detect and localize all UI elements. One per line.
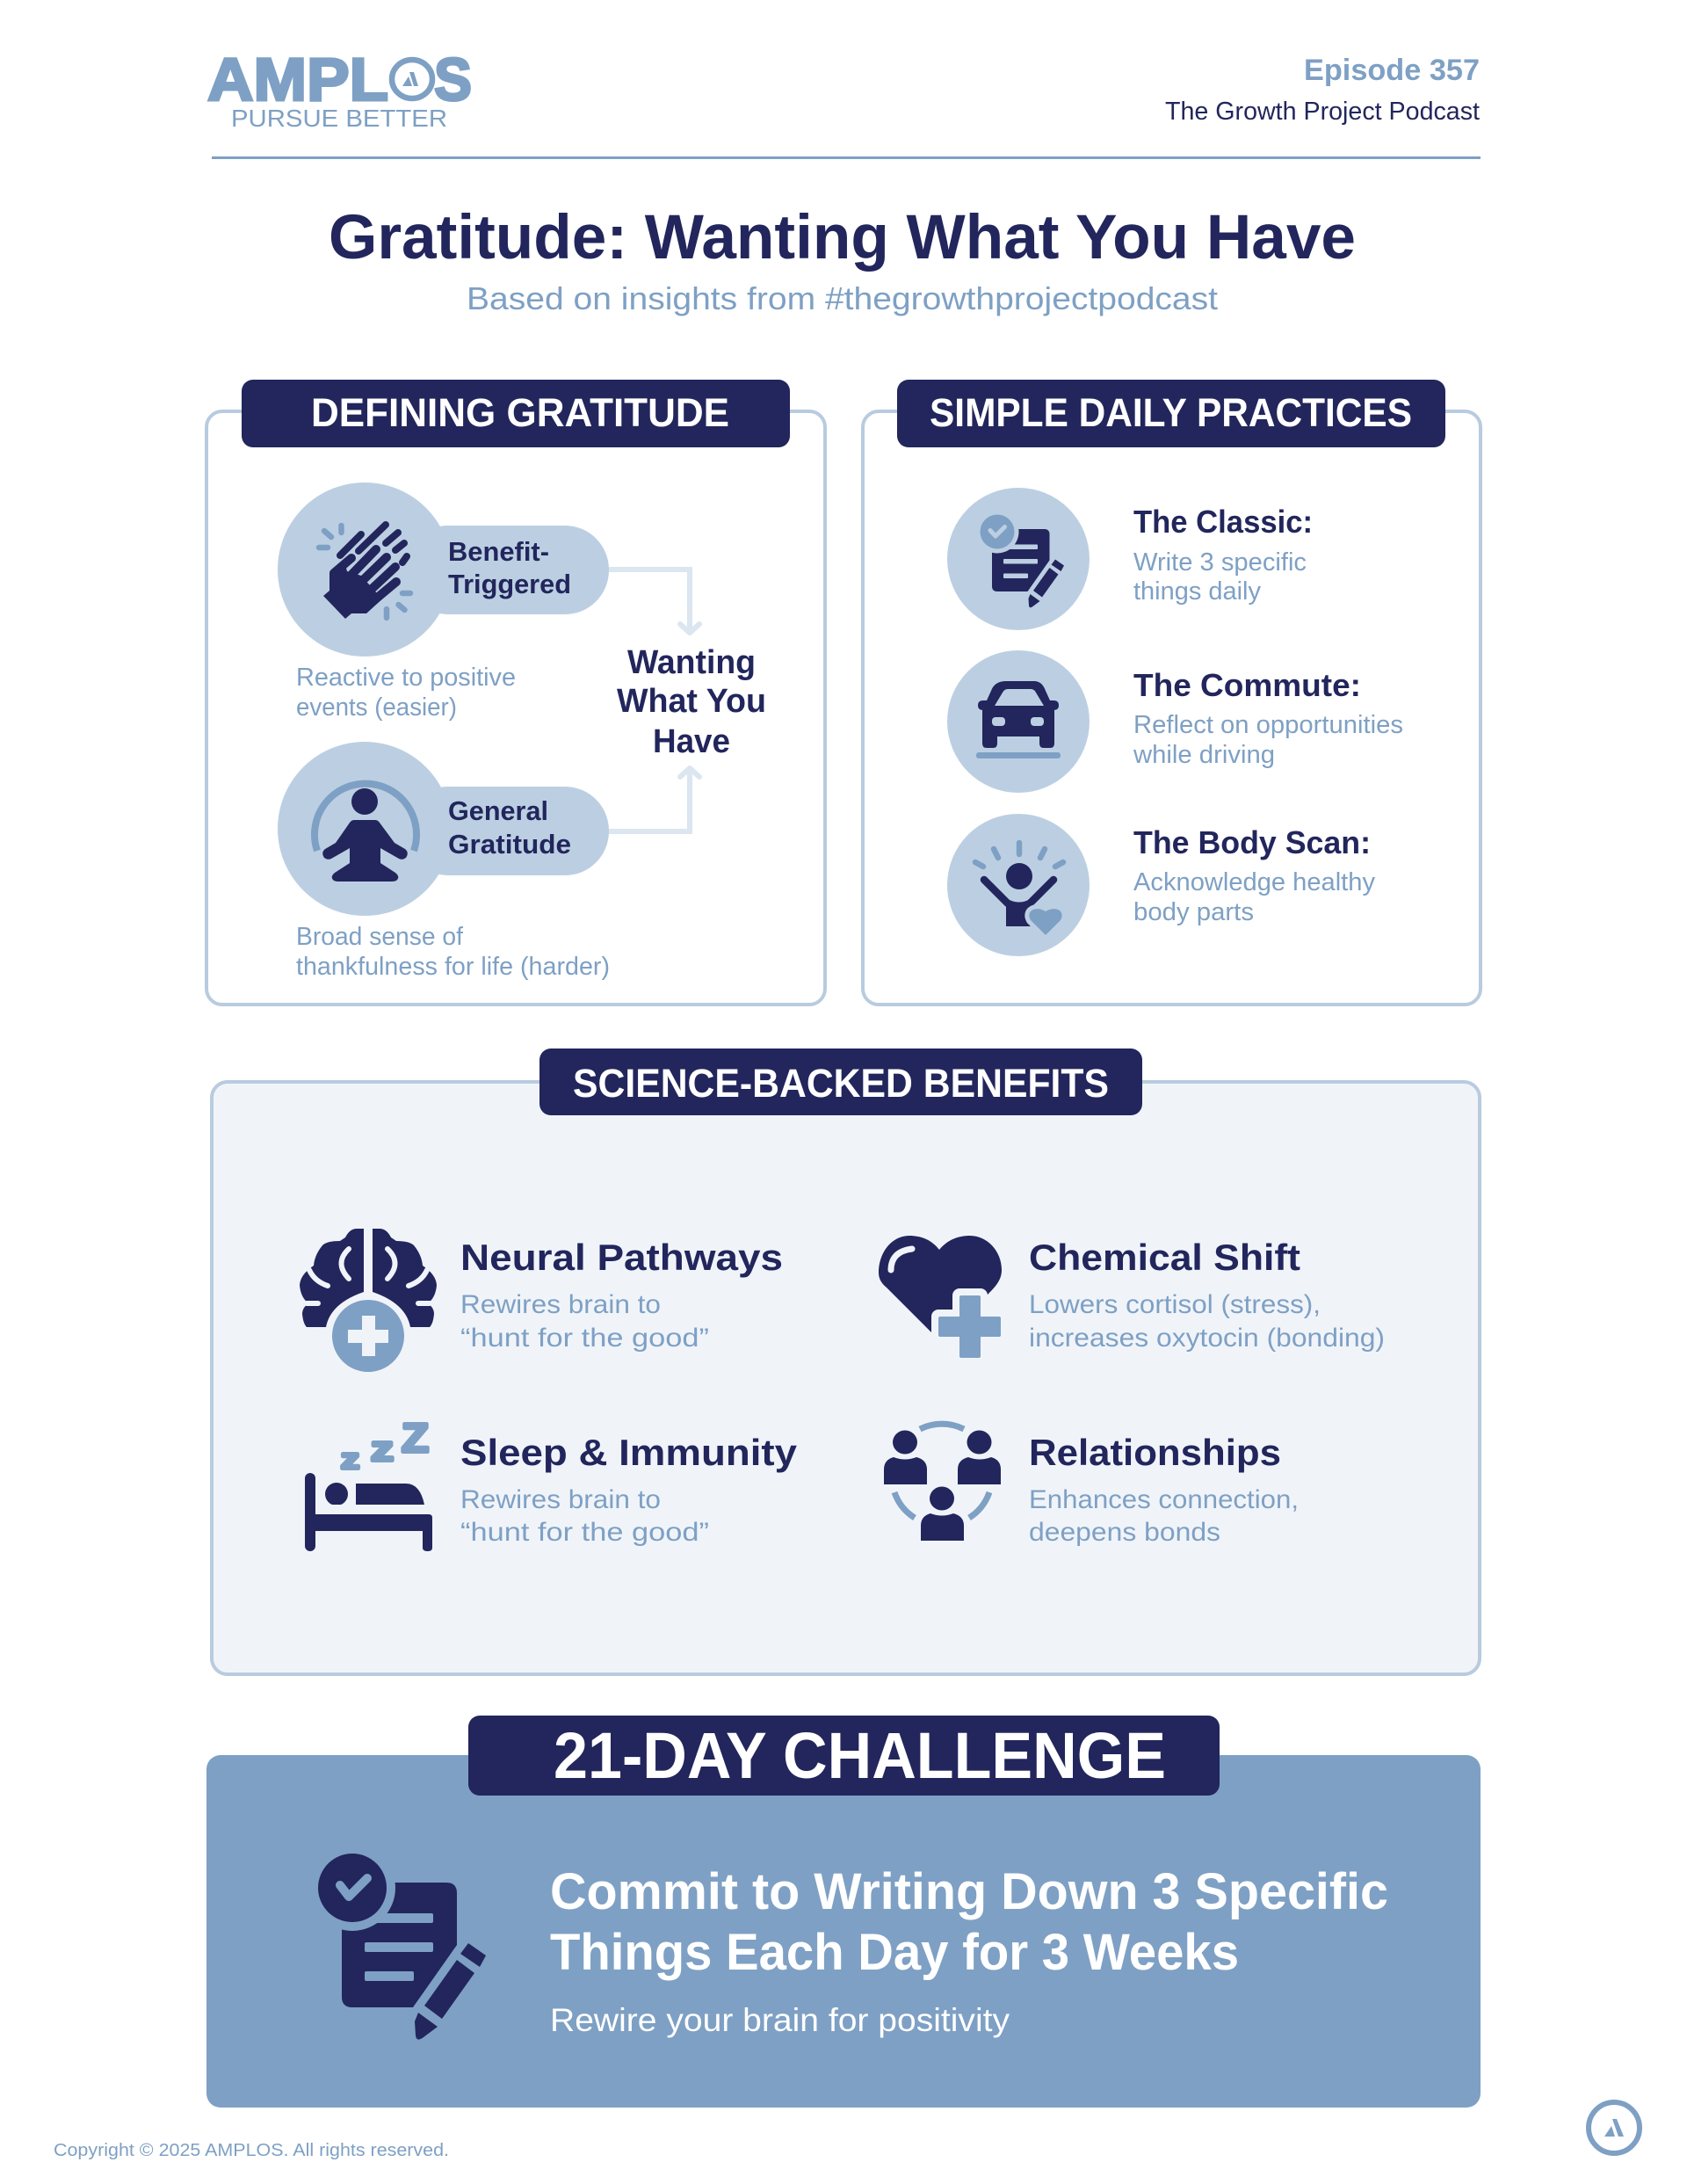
text: sleep and immunity: Sleep & Immunity: [460, 1432, 798, 1473]
arrow: general gratitude to wanting: [606, 768, 699, 831]
practice: the commute: [947, 650, 1403, 793]
icon: bed with zzz: Z: [402, 1415, 429, 1461]
text: broad description: [296, 923, 610, 981]
label: general gratitude: [448, 795, 571, 860]
panel: simple daily practices: [863, 380, 1481, 1005]
text: challenge commitment: Things Each Day for 3 Weeks: [550, 1924, 1239, 1981]
practice: the classic: [947, 488, 1313, 630]
text: sleep and immunity: Rewires brain to: [460, 1485, 661, 1514]
heading: science-backed benefits: [539, 1048, 1142, 1115]
text: the body scan: The Body Scan:: [1133, 824, 1371, 860]
text: the classic: things daily: [1133, 577, 1261, 606]
icon: heart with plus: [879, 1236, 1002, 1358]
benefit: sleep and immunity: [305, 1415, 798, 1551]
text: sleep and immunity: [460, 1432, 798, 1547]
text: broad description: Broad sense of: [296, 923, 464, 951]
text: relationships: Enhances connection,: [1029, 1485, 1299, 1514]
icon: bed with zzz: z: [341, 1443, 359, 1475]
header: logo: [207, 46, 472, 132]
panel: 21-day challenge: [206, 1716, 1481, 2108]
heading: science-backed benefits: SCIENCE-BACKED BENEFITS: [573, 1061, 1109, 1106]
text: challenge commitment: Commit to Writing Down 3 Specific: [550, 1863, 1388, 1920]
title: Gratitude: Wanting What You Have: [329, 203, 1356, 272]
text: neural pathways: Rewires brain to: [460, 1290, 661, 1319]
text: challenge tagline: Rewire your brain for positivity: [550, 2002, 1010, 2038]
icon: document, check and pen: [309, 1845, 486, 2040]
icon: document and pen: [975, 510, 1064, 607]
icon: three people in a circle: [884, 1424, 1001, 1541]
label: benefit-triggered: Benefit-: [448, 536, 549, 567]
header: logo: PURSUE BETTER: [231, 105, 447, 132]
icon: bed with zzz: z: [371, 1430, 394, 1469]
text: reactive description: [296, 664, 516, 722]
label: general gratitude: General: [448, 795, 548, 826]
text: the classic: Write 3 specific: [1133, 548, 1307, 577]
subtitle: Based on insights from #thegrowthprojectpodcast: [467, 280, 1218, 316]
text: wanting what you have: Wanting: [627, 644, 756, 681]
practice: the body scan: [947, 814, 1375, 956]
text: relationships: Relationships: [1029, 1432, 1281, 1473]
text: neural pathways: Neural Pathways: [460, 1237, 783, 1278]
text: wanting what you have: [617, 644, 766, 760]
label: benefit-triggered: Triggered: [448, 569, 571, 599]
text: sleep and immunity: “hunt for the good”: [460, 1518, 709, 1547]
text: chemical shift: [1029, 1237, 1385, 1353]
label: general gratitude: Gratitude: [448, 829, 571, 860]
text: chemical shift: increases oxytocin (bonding): [1029, 1324, 1385, 1353]
heading: defining gratitude: DEFINING GRATITUDE: [311, 390, 729, 435]
text: the commute: Reflect on opportunities: [1133, 711, 1403, 739]
node: benefit-triggered: [278, 483, 609, 657]
header: episode info: [1165, 54, 1480, 126]
icon: meditating person: [315, 784, 416, 882]
icon: person with heart: [975, 843, 1063, 935]
text: chemical shift: Chemical Shift: [1029, 1237, 1300, 1278]
panel: science-backed benefits: [212, 1048, 1480, 1674]
text: the classic: The Classic:: [1133, 504, 1313, 540]
benefit: neural pathways: [300, 1229, 783, 1376]
heading: 21-day challenge: 21-DAY CHALLENGE: [554, 1719, 1166, 1792]
header: logo: AMPL: [207, 46, 388, 113]
icon: car: [976, 681, 1061, 758]
footer: copyright: Copyright © 2025 AMPLOS. All rights reserved.: [54, 2141, 449, 2160]
text: broad description: thankfulness for life (harder): [296, 953, 610, 981]
panel: defining gratitude: [206, 380, 825, 1005]
text: neural pathways: “hunt for the good”: [460, 1324, 709, 1353]
arrow: benefit-triggered to wanting: [606, 570, 699, 633]
text: the body scan: body parts: [1133, 898, 1254, 926]
text: the commute: [1133, 667, 1403, 769]
text: relationships: deepens bonds: [1029, 1518, 1220, 1547]
text: the classic: [1133, 504, 1313, 606]
text: the body scan: [1133, 824, 1375, 926]
heading: defining gratitude: [242, 380, 790, 447]
text: chemical shift: Lowers cortisol (stress),: [1029, 1290, 1321, 1319]
benefit: relationships: [884, 1424, 1299, 1547]
footer: logo mark: [1589, 2102, 1640, 2153]
header: episode info: Episode 357: [1304, 54, 1480, 87]
text: challenge commitment: [550, 1863, 1388, 1981]
text: wanting what you have: What You: [617, 683, 766, 720]
text: reactive description: events (easier): [296, 693, 457, 722]
icon: brain with plus: [300, 1229, 437, 1376]
icon: clapping hands: [319, 525, 410, 619]
text: wanting what you have: Have: [653, 723, 730, 760]
heading: simple daily practices: [897, 380, 1445, 447]
text: relationships: [1029, 1432, 1299, 1547]
text: reactive description: Reactive to positive: [296, 664, 516, 692]
label: benefit-triggered: [448, 536, 571, 599]
node: general gratitude: [278, 742, 609, 916]
benefit: chemical shift: [879, 1236, 1385, 1358]
text: the commute: while driving: [1133, 741, 1275, 769]
text: the commute: The Commute:: [1133, 667, 1361, 703]
icon: bed with zzz: [305, 1415, 432, 1551]
text: the body scan: Acknowledge healthy: [1133, 868, 1375, 896]
header: logo: S: [434, 46, 472, 113]
header: episode info: The Growth Project Podcast: [1165, 98, 1480, 126]
heading: simple daily practices: SIMPLE DAILY PRACTICES: [930, 390, 1412, 435]
text: neural pathways: [460, 1237, 783, 1353]
